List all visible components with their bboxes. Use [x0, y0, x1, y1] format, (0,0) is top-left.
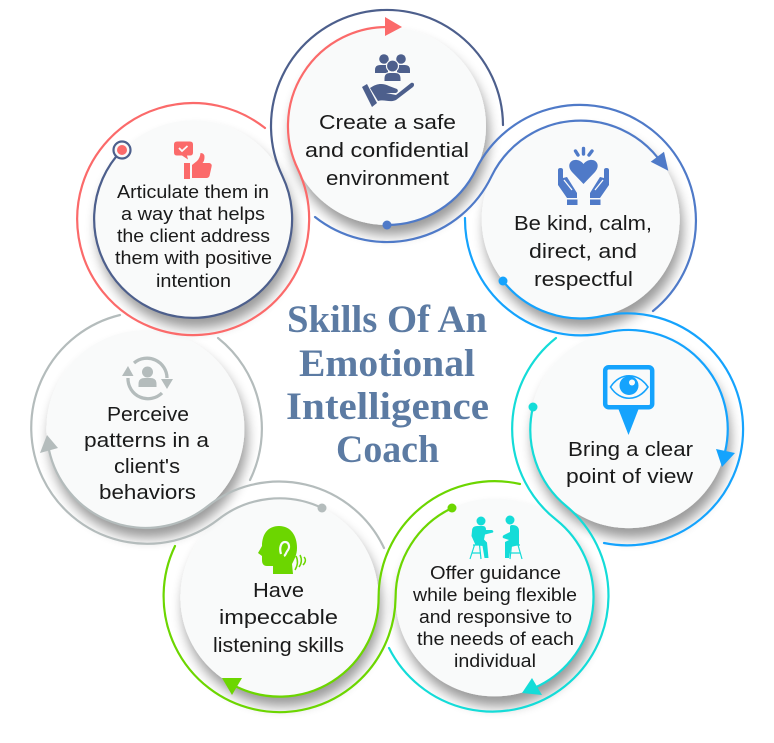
text: have impeccable: listening skills — [213, 634, 344, 657]
text: articulate: intention — [156, 271, 231, 291]
panel: offer guidance — [396, 498, 594, 696]
text: offer guidance: Offer guidance — [430, 563, 561, 583]
title: Skills Of An — [287, 298, 487, 341]
icon: check bubble and thumbs up — [174, 142, 212, 179]
icon: people in a hand — [362, 54, 414, 107]
icon: two seated people — [470, 516, 522, 559]
arrow: safe environment to be kind — [315, 105, 696, 311]
title: Intelligence — [286, 385, 489, 428]
text: offer guidance: while being flexible — [412, 585, 577, 605]
panel: be kind — [482, 120, 680, 318]
text: create a safe — [305, 111, 469, 190]
icon: heart in hands — [558, 148, 609, 205]
text: perceive patterns: patterns in a — [84, 429, 210, 452]
arrow: articulate to safe environment — [77, 10, 503, 335]
icon: head with ear — [258, 526, 305, 574]
arrow: clear view to offer guidance — [389, 338, 608, 712]
text: perceive patterns: behaviors — [99, 481, 196, 504]
text: articulate: Articulate them in — [117, 182, 269, 202]
text: be kind: Be kind, calm, — [514, 212, 652, 235]
title — [286, 298, 489, 471]
text: offer guidance: individual — [454, 651, 536, 671]
text: articulate: a way that helps — [121, 204, 265, 224]
text: create a safe: and confidential — [305, 139, 469, 162]
text: perceive patterns — [84, 403, 210, 504]
text: articulate: the client address — [117, 226, 270, 246]
text: create a safe: Create a safe — [319, 111, 456, 134]
text: articulate: them with positive — [115, 248, 272, 268]
text: bring a clear: point of view — [566, 465, 693, 488]
text: be kind: respectful — [534, 268, 633, 291]
text: perceive patterns: Perceive — [107, 403, 189, 426]
panel: bring a clear point of view — [530, 330, 728, 528]
text: be kind: direct, and — [529, 240, 637, 263]
text: offer guidance: the needs of each — [417, 629, 574, 649]
panel: create a safe environment — [288, 27, 486, 225]
text: have impeccable: impeccable — [219, 606, 338, 629]
text: bring a clear: Bring a clear — [568, 438, 693, 461]
text: be kind — [514, 212, 652, 291]
text: have impeccable — [213, 579, 344, 657]
panel: perceive patterns — [46, 330, 244, 528]
text: offer guidance: and responsive to — [419, 607, 572, 627]
arrow: listening to perceive — [31, 315, 384, 548]
text: bring a clear — [566, 438, 693, 488]
icon: eye pin — [605, 367, 652, 435]
text: have impeccable: Have — [253, 579, 304, 602]
arrow: be kind to clear view — [465, 218, 743, 545]
text: offer guidance — [412, 563, 577, 671]
arrow: offer guidance to listening — [164, 481, 520, 712]
panel: articulate them — [94, 120, 292, 318]
panel: impeccable listening — [180, 498, 378, 696]
text: articulate — [115, 182, 272, 291]
title: Emotional — [299, 342, 475, 385]
text: create a safe: environment — [326, 167, 449, 190]
title: Coach — [336, 428, 439, 471]
text: perceive patterns: client's — [114, 455, 180, 478]
icon: person with cycle arrows — [122, 358, 173, 399]
